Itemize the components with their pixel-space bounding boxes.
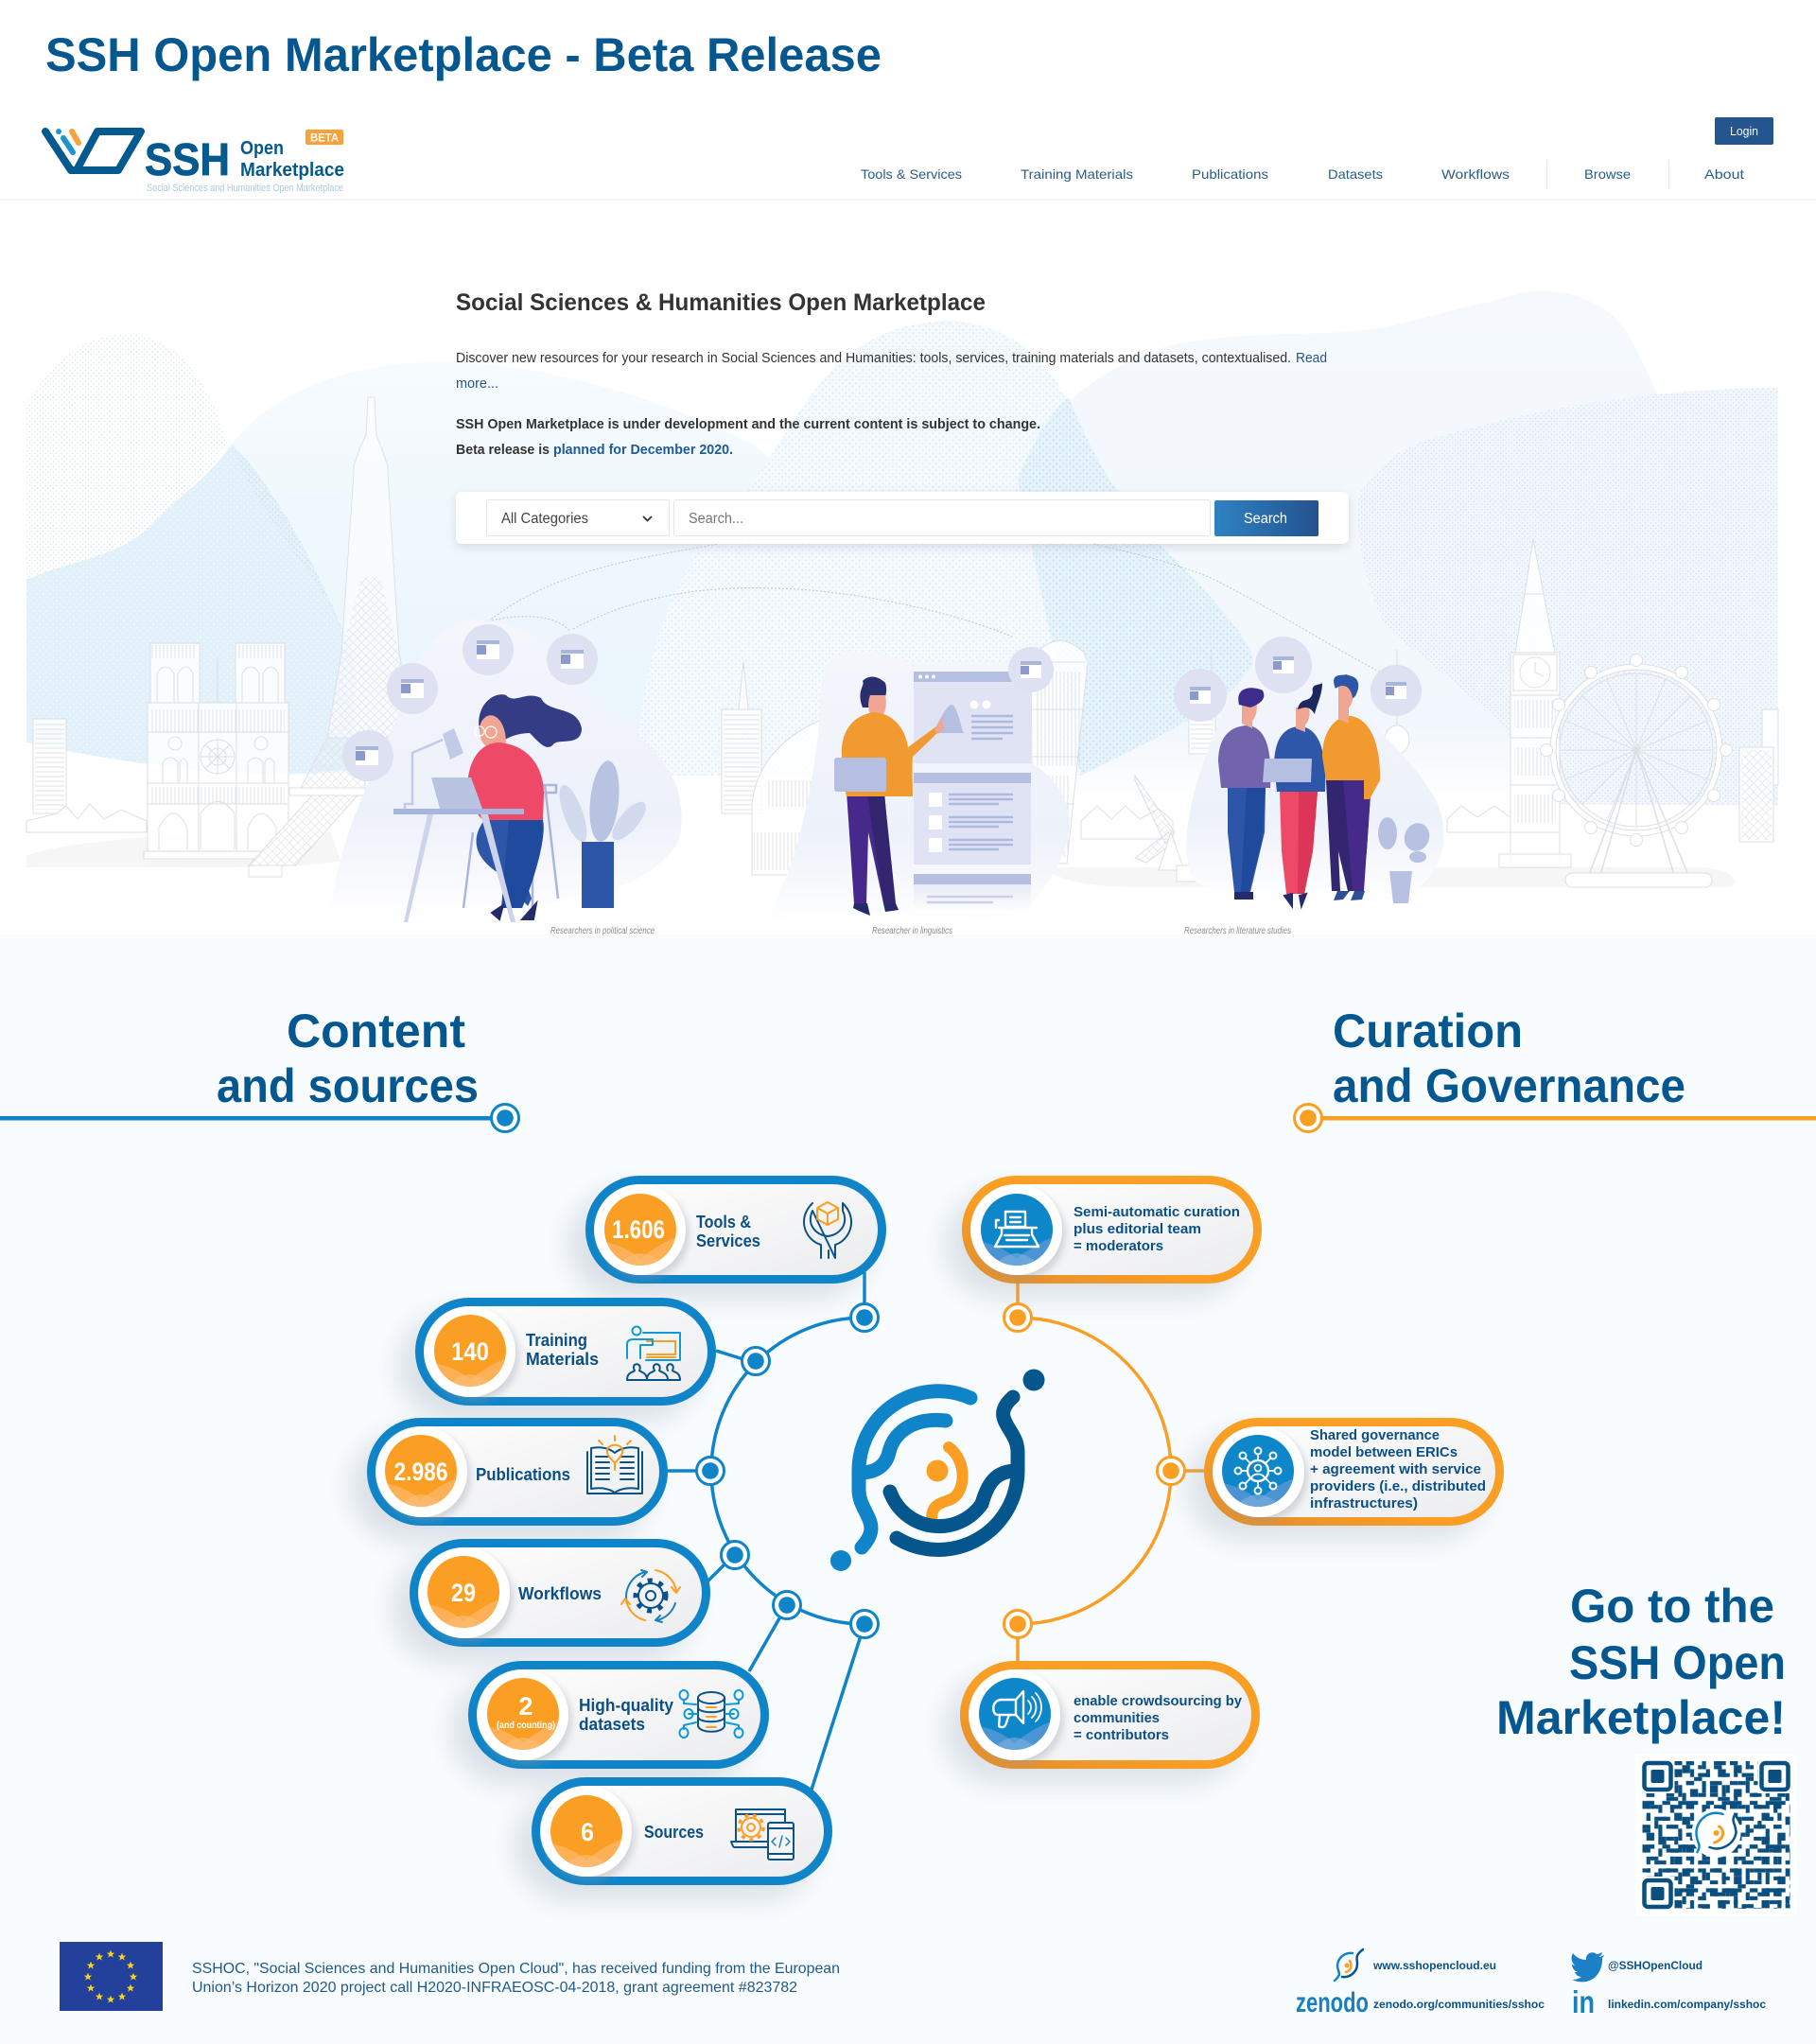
orange nodes (1004, 1303, 1184, 1638)
text: infrastructures) (1310, 1495, 1418, 1511)
header bottom rule (0, 199, 1816, 201)
researcher B (1274, 683, 1325, 906)
heading: curation and governance (1333, 1005, 1685, 1112)
pants (847, 792, 894, 903)
plant (1378, 817, 1433, 903)
funding statement (192, 1961, 840, 1996)
navigation (861, 160, 1744, 189)
illustration: London Eye (1540, 655, 1733, 887)
label: Services (696, 1232, 760, 1250)
navigation: Training Materials (1021, 166, 1133, 182)
hero intro text (456, 350, 1327, 392)
finder squares (1640, 1759, 1791, 1911)
navigation: Browse (1584, 166, 1631, 182)
caption: linguistics: Researcher in linguistics (872, 926, 952, 936)
linkedin mark: in (1572, 1984, 1595, 2019)
logo mark (45, 129, 141, 170)
hair (479, 694, 582, 747)
label: Tools & (696, 1213, 751, 1232)
beta badge: BETA (310, 131, 339, 144)
logo outer blue arc (859, 1391, 970, 1547)
call to action: Marketplace! (1496, 1691, 1786, 1744)
search input: Search... (689, 511, 743, 527)
caption: political science: Researchers in political science (550, 926, 655, 936)
logo wordmark Marketplace: Marketplace (240, 160, 344, 181)
icon: database network (679, 1690, 743, 1738)
call to action (1496, 1580, 1786, 1744)
navigation: Tools & Services (861, 166, 962, 182)
plant pot (582, 842, 614, 908)
text: communities (1074, 1710, 1160, 1726)
illustration: Notre Dame (144, 643, 292, 859)
dotted connection arcs (488, 544, 1383, 673)
value (428, 1556, 499, 1630)
pill: workflows (393, 1544, 706, 1662)
figure: three researchers (1218, 674, 1433, 906)
text: Shared governance (1310, 1427, 1440, 1443)
icon: classroom (627, 1326, 680, 1380)
hero illustration background (26, 290, 1778, 887)
logo wordmark SSH: SSH (145, 135, 230, 185)
category select (486, 499, 670, 535)
text: = moderators (1074, 1238, 1163, 1254)
pill: publications (350, 1423, 664, 1541)
beta badge (306, 130, 343, 145)
illustration: left skyscraper (33, 719, 66, 813)
illustration: skyscraper and Colosseum (722, 662, 832, 875)
search bar (456, 492, 1349, 544)
text (1074, 1693, 1243, 1743)
shoes (853, 903, 899, 916)
hero notice text: Beta release is (456, 442, 550, 458)
text: = contributors (1074, 1727, 1169, 1743)
QR centre logo (1691, 1808, 1740, 1858)
logo blue dot (830, 1550, 851, 1571)
text: model between ERICs (1310, 1444, 1458, 1460)
hero heading: Social Sciences & Humanities Open Marketplace (456, 289, 986, 316)
search button (1214, 500, 1318, 536)
navigation: Datasets (1328, 166, 1383, 182)
call to action: SSH Open (1569, 1636, 1786, 1689)
title: SSH Open Marketplace - Beta Release (45, 28, 882, 81)
link: linkedin: linkedin.com/company/sshoc (1608, 1998, 1766, 2011)
search button: Search (1244, 511, 1287, 527)
QR code (1636, 1755, 1797, 1915)
desk legs (404, 814, 515, 922)
character backdrop: linguistics (768, 652, 1070, 928)
value: (and counting) (497, 1720, 555, 1731)
panel one (914, 672, 1031, 763)
torso (842, 712, 940, 796)
central SSHOC logo (830, 1370, 1044, 1571)
figure: researcher at desk (393, 694, 652, 922)
bubbles: political science (342, 624, 598, 781)
label (526, 1331, 599, 1369)
icon: wrench and cube (804, 1202, 851, 1258)
logo outer dark arc (897, 1397, 1018, 1549)
text (1310, 1427, 1486, 1511)
search input (673, 499, 1211, 535)
illustration: Berlin tower and building (1189, 648, 1409, 763)
heading: content and sources: and sources (217, 1059, 479, 1112)
caption: literature studies: Researchers in literature studies (1184, 926, 1291, 936)
navigation: Workflows (1441, 166, 1510, 182)
logo inner dark arc (890, 1471, 1017, 1527)
value: 29 (451, 1579, 476, 1607)
illustration: right buildings (1739, 709, 1778, 842)
illustration: Big Ben (1447, 539, 1571, 867)
logo wordmark Open: Open (240, 138, 284, 159)
value (434, 1315, 506, 1389)
value (385, 1435, 457, 1509)
hero intro text: Discover new resources for your research in Social Sciences and Humanities: tools, services, training materials and datasets, contextualised. (456, 350, 1291, 366)
icon: laptop and phone (731, 1809, 794, 1860)
value: 2.986 (393, 1458, 448, 1486)
desk (393, 809, 524, 814)
legs (477, 820, 541, 906)
torso (467, 742, 544, 820)
hero intro text: more... (456, 376, 498, 392)
face (868, 695, 886, 728)
desk lamp (405, 740, 443, 809)
blue nodes (696, 1303, 878, 1638)
hero notice text: planned for December 2020. (553, 442, 733, 458)
value (550, 1795, 622, 1869)
value (604, 1194, 676, 1267)
text: providers (i.e., distributed (1310, 1478, 1486, 1494)
funding statement: SSHOC, "Social Sciences and Humanities Open Cloud", has received funding from the European (192, 1961, 840, 1977)
laptop (431, 777, 482, 809)
value: 2 (518, 1692, 533, 1721)
hair (860, 677, 886, 708)
pill: governance (1187, 1423, 1500, 1541)
hero notice text (456, 416, 1040, 458)
blue connectors (667, 1272, 864, 1790)
logo dark dot (1023, 1370, 1044, 1390)
login button: Login (1730, 125, 1758, 138)
icon: book and idea (587, 1436, 642, 1494)
icon: SSHOC small logo (1335, 1949, 1363, 1981)
tablet (834, 758, 886, 792)
icon: megaphone (979, 1678, 1051, 1752)
heading: content and sources: Content (287, 1005, 465, 1057)
illustration: Eiffel tower (249, 397, 414, 877)
plant leaves (554, 760, 652, 846)
login button (1715, 117, 1773, 145)
speech bubble (1008, 647, 1054, 692)
heading: curation and governance: and Governance (1333, 1059, 1685, 1112)
researcher A (1218, 688, 1270, 900)
value: 6 (581, 1818, 594, 1846)
link: twitter handle: @SSHOpenCloud (1608, 1959, 1702, 1972)
face (480, 715, 506, 759)
character backdrop: literature (1186, 655, 1443, 904)
logo orange dot (927, 1460, 948, 1481)
logo inner blue arc (861, 1420, 946, 1473)
researcher C (1322, 674, 1380, 900)
text: plus editorial team (1074, 1221, 1201, 1237)
chair (463, 785, 558, 913)
logo tagline: Social Sciences and Humanities Open Marketplace (147, 183, 343, 194)
text: Semi-automatic curation (1074, 1204, 1240, 1220)
label: Training (526, 1331, 587, 1350)
value: 140 (451, 1337, 489, 1366)
illustration: rooftops centre and windmill (1081, 776, 1197, 882)
label: Workflows (518, 1584, 602, 1603)
link: website: www.sshopencloud.eu (1372, 1959, 1496, 1972)
illustration: rooftops left (26, 804, 147, 832)
label: datasets (579, 1715, 645, 1734)
hero notice text: SSH Open Marketplace is under development and the current content is subject to change. (456, 416, 1040, 432)
label (579, 1696, 673, 1734)
icon: typewriter (981, 1194, 1053, 1267)
label: High-quality (579, 1696, 673, 1715)
bubbles: literature (1174, 637, 1422, 722)
character backdrop: political science (330, 620, 682, 922)
lower section background (0, 935, 1816, 2044)
tablet (1263, 759, 1312, 782)
figure: linguist with panels (834, 647, 1054, 916)
pill: tools and services (568, 1180, 882, 1299)
text (1074, 1204, 1240, 1254)
heading: content and sources (217, 1005, 479, 1112)
zenodo wordmark: zenodo (1296, 1987, 1369, 2018)
pill: high-quality datasets (451, 1665, 764, 1784)
panel two (914, 773, 1031, 865)
navigation: About (1704, 166, 1744, 182)
text: enable crowdsourcing by (1074, 1693, 1243, 1709)
label: Materials (526, 1350, 599, 1369)
pill: training materials (398, 1302, 711, 1421)
label: Publications (476, 1465, 570, 1484)
heading: curation and governance: Curation (1333, 1005, 1523, 1057)
text: + agreement with service (1310, 1461, 1481, 1477)
label: Sources (644, 1823, 704, 1842)
value: 1.606 (612, 1215, 665, 1244)
navigation: Publications (1192, 166, 1268, 182)
EU flag (60, 1942, 163, 2011)
funding statement: Union’s Horizon 2020 project call H2020-INFRAEOSC-04-2018, grant agreement #823782 (192, 1980, 797, 1996)
icon: gear and cycle (621, 1570, 680, 1622)
panel three (914, 874, 1031, 913)
shoes (492, 903, 536, 919)
label (696, 1213, 760, 1250)
orange heading rule (1294, 1105, 1816, 1131)
logo orange arc (932, 1447, 963, 1519)
category select: All Categories (501, 511, 588, 527)
blue heading rule (0, 1105, 518, 1131)
value (487, 1678, 559, 1752)
call to action: Go to the (1570, 1580, 1774, 1633)
pill: crowdsourcing (943, 1665, 1256, 1784)
lamp shade (443, 728, 463, 760)
link: zenodo: zenodo.org/communities/sshoc (1373, 1998, 1545, 2011)
glasses (475, 726, 497, 738)
hero intro text: Read (1296, 350, 1327, 366)
icon: distributed network (1222, 1435, 1294, 1509)
illustration: Pisa tower (1031, 641, 1088, 864)
icon: twitter (1572, 1952, 1604, 1982)
orange connectors (1018, 1282, 1206, 1663)
site logo (45, 129, 344, 194)
pill: curation (945, 1180, 1258, 1299)
pill: sources (515, 1782, 829, 1900)
hand (934, 717, 944, 734)
